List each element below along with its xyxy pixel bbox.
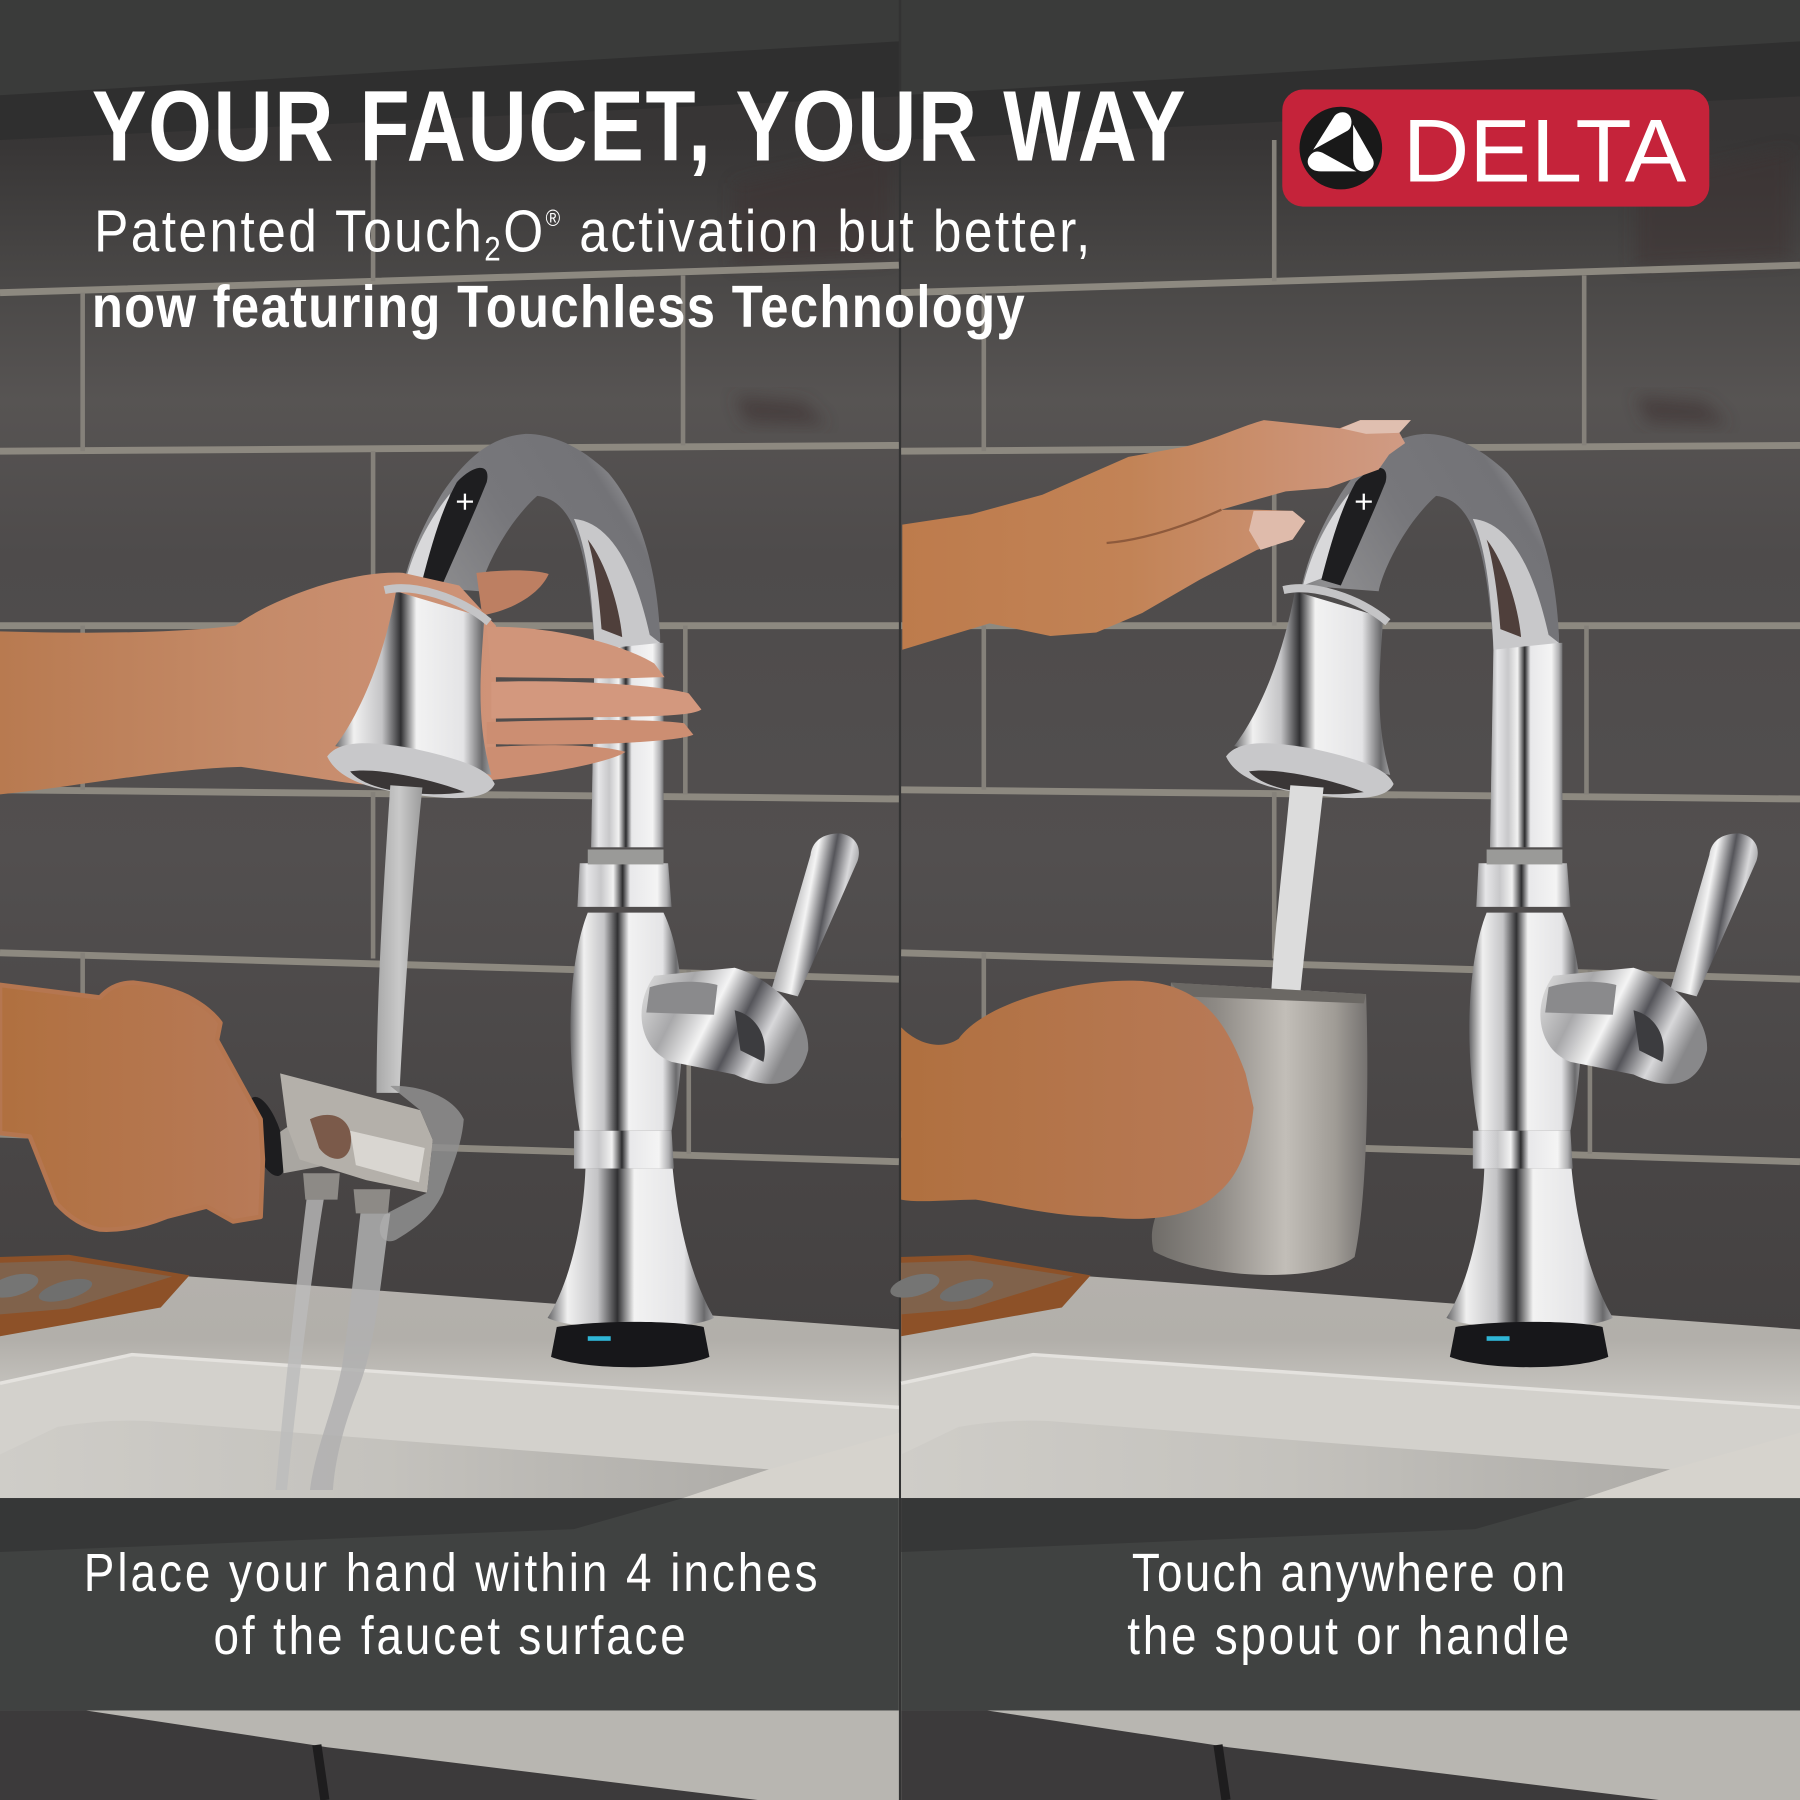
water splash and falling streams <box>276 1086 464 1490</box>
logo: Delta <box>1282 90 1709 207</box>
right hand hovering over the spout <box>902 420 1411 650</box>
left open hand behind spray head <box>0 570 701 794</box>
caption: left: of the faucet surface <box>214 1606 686 1666</box>
right hand holding mug <box>901 981 1254 1219</box>
subtitle line two: now featuring Touchless Technology <box>92 273 1025 340</box>
caption: right: the spout or handle <box>1127 1606 1569 1666</box>
title: YOUR FAUCET, YOUR WAY <box>92 71 1186 183</box>
logo: Delta: DELTA <box>1403 100 1687 200</box>
subtitle line one: O <box>503 198 543 264</box>
subtitle line one: activation but better, <box>563 198 1090 264</box>
steel mug <box>1152 983 1367 1275</box>
subtitle line one: ® <box>546 206 560 232</box>
caption: left <box>84 1543 818 1666</box>
panel: right photo, touch activation <box>888 0 1800 1800</box>
right water stream <box>1271 785 1324 1001</box>
left water stream <box>377 785 422 1093</box>
panel: left photo, touchless activation <box>0 0 899 1800</box>
caption: right: Touch anywhere on <box>1132 1543 1565 1603</box>
subtitle line one: 2 <box>484 229 501 268</box>
portafilter <box>239 1073 433 1213</box>
left hand holding portafilter <box>0 983 263 1230</box>
subtitle line one: Patented Touch <box>94 198 482 264</box>
caption: left: Place your hand within 4 inches <box>84 1543 818 1603</box>
caption: right <box>1127 1543 1569 1666</box>
